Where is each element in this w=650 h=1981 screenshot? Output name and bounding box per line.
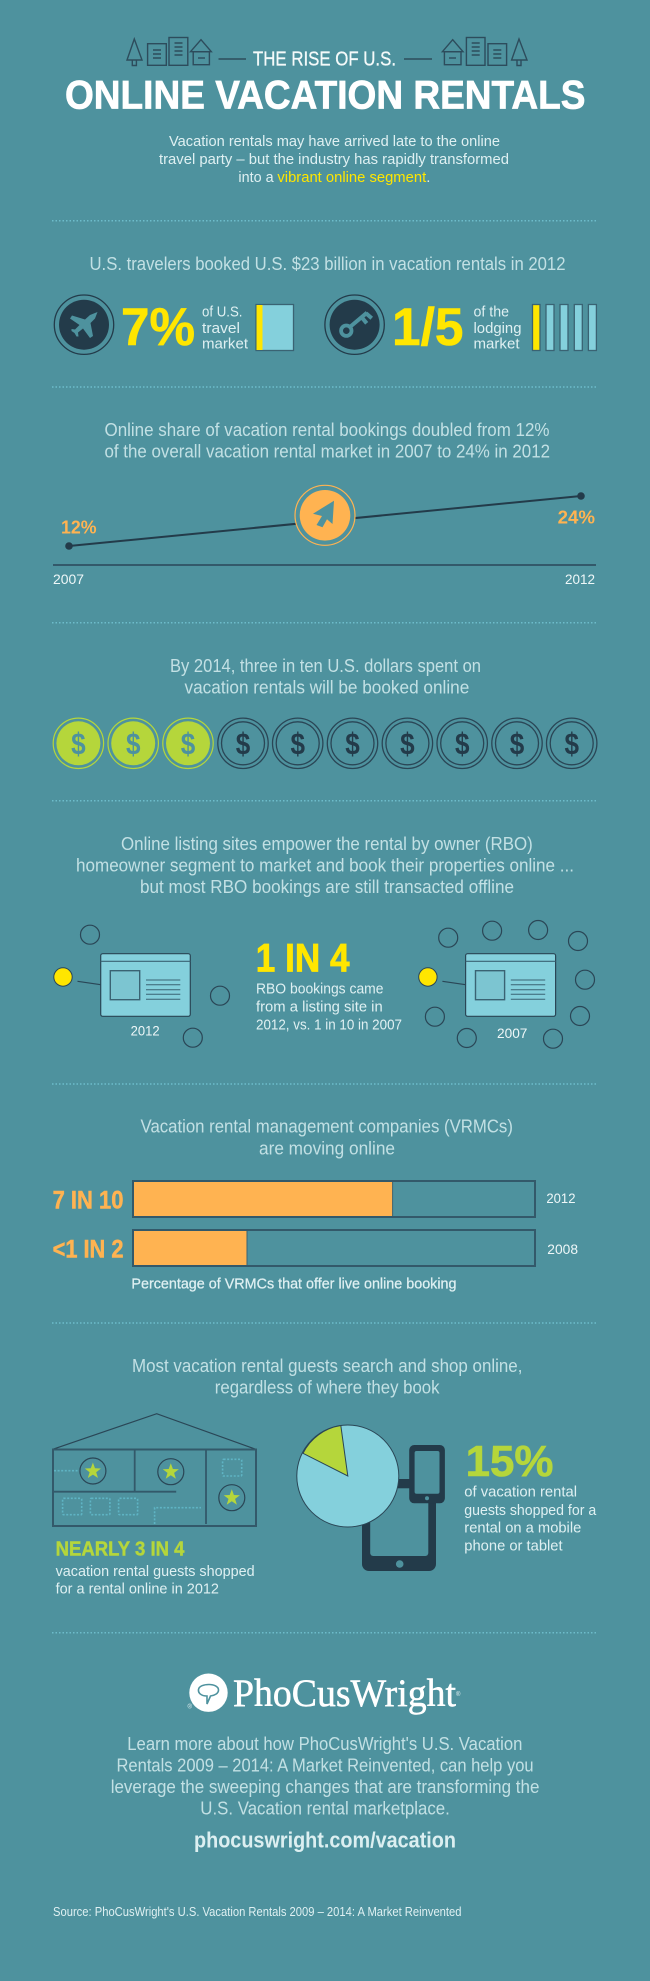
intro text: Vacation rentals may have arrived late to the online — [169, 133, 500, 150]
heading: guests — [132, 1356, 522, 1397]
icon: house floor plan — [53, 1414, 256, 1526]
diagram: listing site 2007 — [419, 920, 594, 1048]
year label: 2012: 2012 — [546, 1190, 576, 1206]
icons: dark dollar coins: $ — [345, 726, 360, 761]
intro text: . — [426, 169, 430, 186]
stat: one fifth: 1/5 — [392, 298, 464, 357]
text: mobile shoppers: of vacation rental — [464, 1484, 577, 1501]
title: ONLINE VACATION RENTALS — [65, 74, 586, 118]
icon: phone — [398, 1445, 445, 1503]
title: THE RISE OF U.S. — [253, 49, 396, 71]
stat: 7 percent: 7% — [121, 298, 195, 357]
text: RBO bookings: from a listing site in — [256, 998, 383, 1015]
icons: green dollar coins: $ — [126, 726, 140, 761]
label: of U.S. travel market: market — [202, 336, 249, 352]
icons: green dollar coins: $ — [181, 726, 195, 761]
source note: Source: PhoCusWright's U.S. Vacation Rentals 2009 – 2014: A Market Reinvented — [53, 1905, 462, 1919]
text: guests shopped online — [56, 1563, 255, 1597]
intro text: vibrant online segment — [277, 169, 427, 186]
text: mobile shoppers: phone or tablet — [464, 1538, 563, 1555]
heading: market size: U.S. travelers booked U.S. $23 billion in vacation rentals in 2012 — [90, 254, 566, 274]
intro text: travel party – but the industry has rapidly transformed — [159, 151, 509, 168]
icons: green dollar coins: $ — [71, 726, 86, 761]
stat: 15 percent: 15% — [466, 1437, 554, 1486]
heading: guests: Most vacation rental guests search and shop online, — [132, 1356, 522, 1376]
stat: nearly 3 in 4: NEARLY 3 IN 4 — [56, 1539, 185, 1561]
stat: 1 in 4: 1 IN 4 — [256, 936, 350, 980]
text: mobile shoppers: rental on a mobile — [464, 1520, 581, 1537]
text: learn more — [111, 1734, 539, 1819]
panel: guests search online — [53, 1356, 597, 1597]
pie chart: 15 percent — [297, 1425, 399, 1527]
year label: 2007: 2007 — [497, 1025, 528, 1041]
axis label: 2007: 2007 — [53, 571, 84, 587]
text: RBO bookings: RBO bookings came — [256, 980, 384, 997]
icon: cursor badge — [295, 485, 355, 545]
caption: percentage of VRMCs: Percentage of VRMCs that offer live online booking — [131, 1275, 456, 1292]
text: guests shopped online: vacation rental guests shopped — [56, 1563, 255, 1580]
icons: dark dollar coins: $ — [290, 726, 305, 761]
heading: VRMCs: Vacation rental management companies (VRMCs) — [140, 1117, 513, 1137]
heading: three in ten: By 2014, three in ten U.S. dollars spent on — [170, 656, 481, 676]
icons: dark dollar coins: $ — [236, 726, 250, 761]
icons: dark dollar coins: $ — [510, 726, 524, 761]
icon: airplane — [54, 295, 114, 354]
heading: online share: of the overall vacation rental market in 2007 to 24% in 2012 — [104, 441, 550, 461]
text: learn more: Rentals 2009 – 2014: A Market Reinvented, can help you — [116, 1755, 534, 1775]
heading: online share: Online share of vacation rental bookings doubled from 12% — [104, 420, 550, 440]
panel: market size — [54, 254, 596, 357]
year label: 2008: 2008 — [547, 1241, 578, 1257]
text: mobile shoppers — [464, 1484, 597, 1555]
heading: VRMCs — [140, 1117, 513, 1159]
title — [65, 49, 586, 118]
label: of the lodging market: market — [474, 336, 520, 352]
intro text — [159, 133, 509, 186]
diagram: listing site 2012 — [54, 925, 229, 1047]
text: learn more: leverage the sweeping changes that are transforming the — [111, 1777, 539, 1797]
logo: PhoCusWright: ® — [188, 1704, 192, 1710]
bar: 2012 — [133, 1181, 535, 1217]
panel: online share line chart — [53, 420, 596, 587]
text: learn more: U.S. Vacation rental marketplace. — [200, 1799, 450, 1819]
heading: online share — [104, 420, 550, 461]
heading: three in ten: vacation rentals will be booked online — [184, 677, 469, 697]
header icons: left skyline — [127, 38, 211, 66]
icons: dark dollar coins: $ — [455, 726, 469, 761]
panel: three in ten dollars — [53, 656, 597, 768]
heading: RBO: but most RBO bookings are still transacted offline — [140, 877, 514, 897]
icons: dark dollar coins: $ — [564, 726, 579, 761]
text: learn more: Learn more about how PhoCusWright's U.S. Vacation — [127, 1734, 522, 1754]
label: of the lodging market: lodging — [474, 320, 522, 337]
line chart — [53, 492, 596, 565]
label: of U.S. travel market — [202, 304, 249, 352]
bar: 2008 — [133, 1230, 535, 1266]
icons: dark dollar coins — [218, 718, 597, 768]
heading: three in ten — [170, 656, 481, 697]
value: 24 percent: 24% — [558, 506, 595, 527]
bar: 7 percent share — [256, 304, 294, 350]
icons: dark dollar coins: $ — [400, 726, 415, 761]
label: of U.S. travel market: of U.S. — [202, 304, 242, 321]
heading: RBO — [76, 834, 574, 897]
icon: tablet — [362, 1485, 436, 1571]
axis label: 2012: 2012 — [565, 571, 595, 587]
text: mobile shoppers: guests shopped for a — [464, 1502, 597, 1519]
text: RBO bookings: 2012, vs. 1 in 10 in 2007 — [256, 1016, 402, 1033]
bars: one of five — [532, 304, 596, 350]
panel: VRMCs bar chart — [53, 1117, 578, 1292]
label: of the lodging market: of the — [474, 304, 509, 321]
link: phocuswright.com/vacation: phocuswright.com/vacation — [194, 1827, 456, 1852]
label: 7 in 10: 7 IN 10 — [53, 1187, 124, 1215]
text: RBO bookings — [256, 980, 402, 1033]
header icons: right skyline — [442, 38, 527, 66]
text: guests shopped online: for a rental online in 2012 — [56, 1580, 219, 1597]
intro text: into a — [238, 169, 274, 186]
icon: key — [325, 295, 384, 354]
label: less than 1 in 2: <1 IN 2 — [53, 1235, 124, 1263]
icons: green dollar coins — [53, 718, 213, 768]
year label: 2012: 2012 — [131, 1023, 160, 1039]
heading: guests: regardless of where they book — [215, 1377, 440, 1397]
logo: PhoCusWright: ® — [456, 1691, 461, 1698]
logo: PhoCusWright: PhoCusWright — [233, 1672, 456, 1715]
heading: VRMCs: are moving online — [259, 1139, 395, 1159]
label: of the lodging market — [474, 304, 522, 352]
label: of U.S. travel market: travel — [202, 320, 240, 337]
value: 12 percent: 12% — [61, 516, 97, 537]
panel: rental by owner — [54, 834, 595, 1048]
heading: RBO: Online listing sites empower the rental by owner (RBO) — [121, 834, 533, 854]
heading: RBO: homeowner segment to market and book their properties online ... — [76, 856, 574, 876]
